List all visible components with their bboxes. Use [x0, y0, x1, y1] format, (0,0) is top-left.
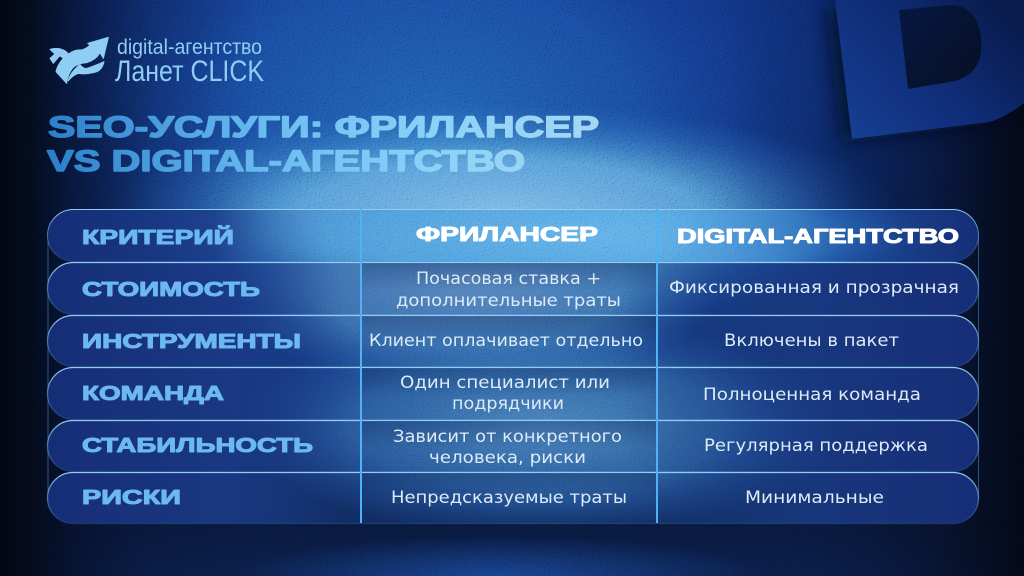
header row: DIGITAL-АГЕНТСТВО	[677, 226, 959, 248]
header row: КРИТЕРИЙ	[82, 225, 234, 249]
row: risks: РИСКИ	[82, 487, 181, 509]
row: tools: ИНСТРУМЕНТЫ	[82, 331, 301, 353]
row: team: КОМАНДА	[82, 383, 224, 405]
row: team	[48, 368, 978, 420]
row: tools	[48, 316, 978, 366]
decorative letter D	[825, 0, 1024, 143]
table outer side lines	[48, 235, 978, 500]
icon: arrow swoosh	[50, 37, 108, 83]
comparison table	[48, 209, 978, 524]
row: cost	[48, 262, 978, 314]
row: risks: Непредсказуемые траты	[391, 488, 627, 507]
title	[47, 111, 599, 178]
column dividers	[361, 209, 657, 523]
logo text: digital-агентство	[117, 36, 262, 59]
row: risks	[48, 472, 978, 524]
row: tools: Включены в пакет	[724, 331, 899, 350]
row: cost: СТОИМОСТЬ	[82, 279, 260, 301]
row: team: подрядчики	[452, 394, 564, 413]
row: tools: Клиент оплачивает отдельно	[369, 331, 643, 350]
header row	[48, 210, 978, 262]
row: team: Полноценная команда	[703, 385, 921, 404]
row: stability: СТАБИЛЬНОСТЬ	[82, 435, 313, 457]
row: team: Один специалист или	[400, 373, 610, 392]
row: stability: Зависит от конкретного	[393, 427, 622, 446]
title: SEO-УСЛУГИ: ФРИЛАНСЕР	[48, 111, 599, 144]
logo	[50, 36, 264, 88]
row: stability: человека, риски	[429, 448, 586, 467]
title: VS DIGITAL-АГЕНТСТВО	[47, 145, 525, 178]
row: cost: Фиксированная и прозрачная	[669, 278, 959, 297]
row: cost: Почасовая ставка +	[416, 269, 601, 288]
row: stability	[48, 420, 978, 472]
row: cost: дополнительные траты	[396, 291, 621, 310]
row: stability: Регулярная поддержка	[704, 436, 928, 455]
header row: ФРИЛАНСЕР	[416, 224, 598, 246]
row: risks: Минимальные	[745, 488, 884, 507]
logo: Ланет CLICK	[115, 55, 264, 88]
